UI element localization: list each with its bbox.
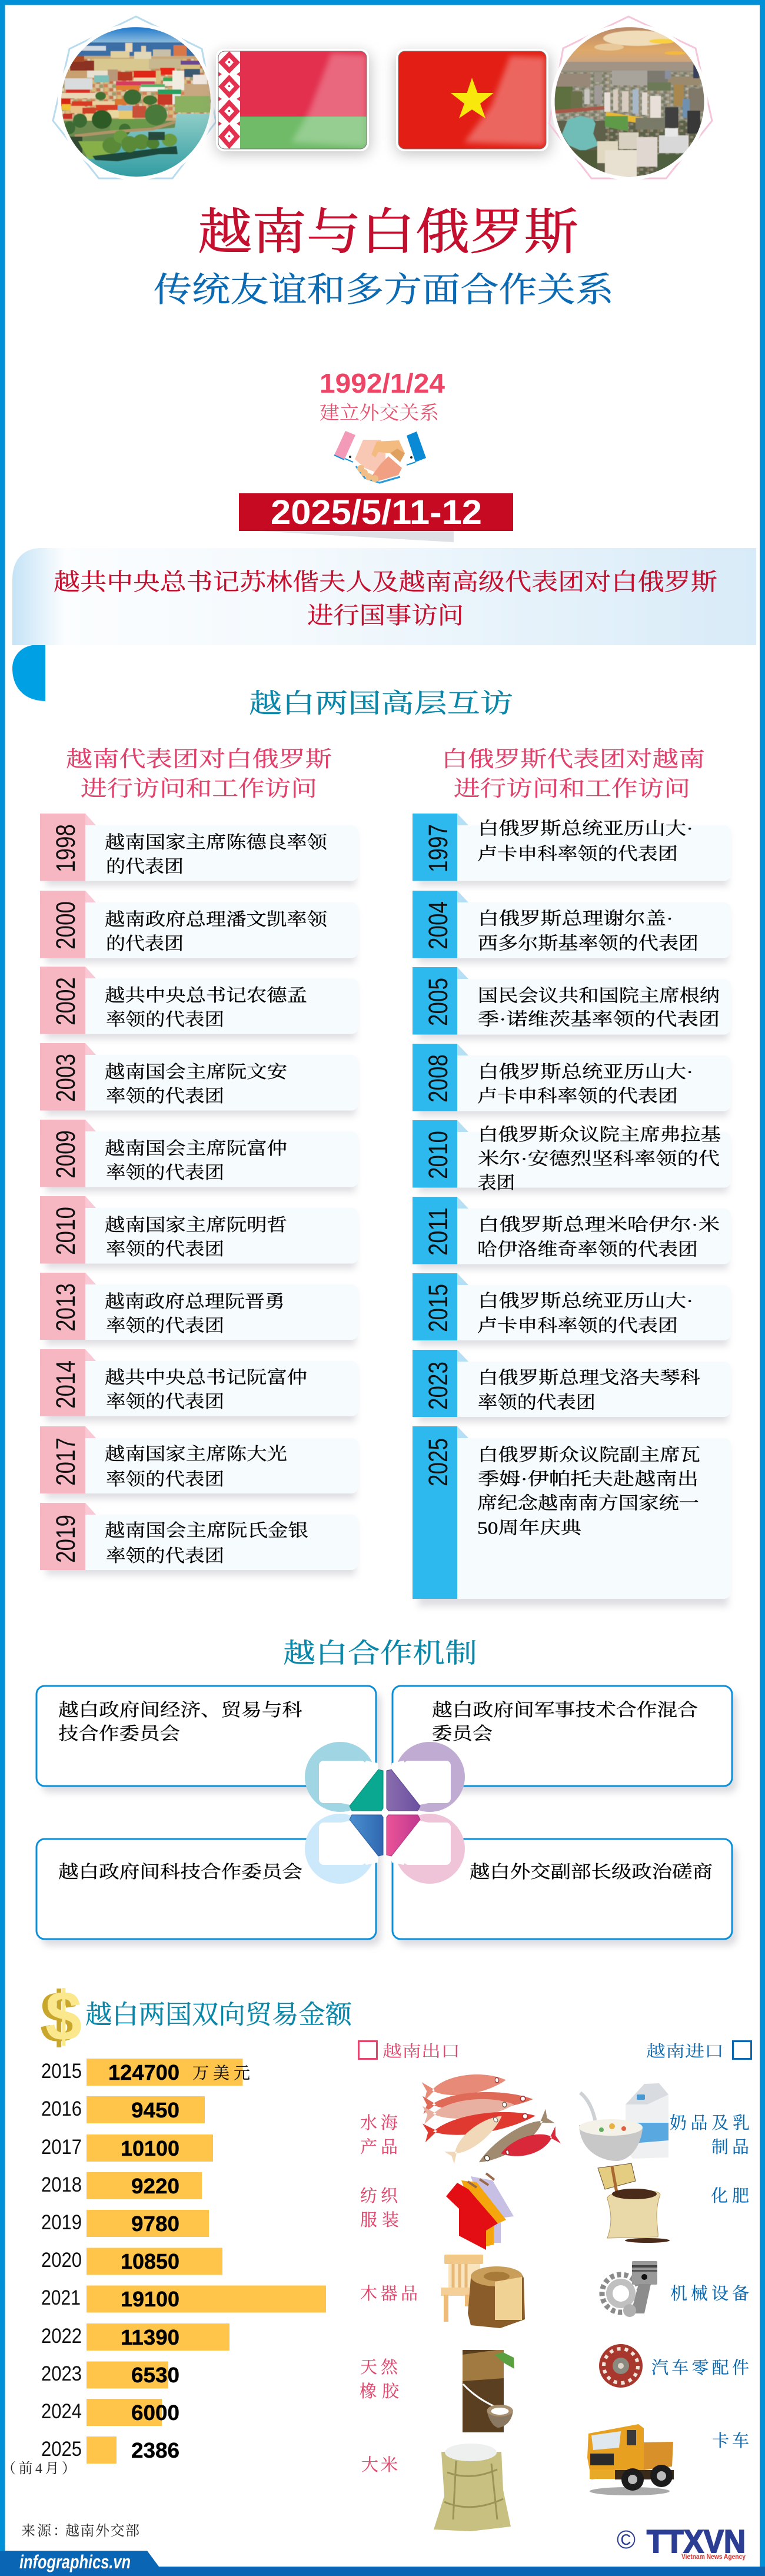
- card: Vietnam 2000: [40, 891, 358, 963]
- card: Vietnam 2013: [40, 1273, 358, 1345]
- import label: auto parts: 汽车零配件: [651, 2358, 749, 2378]
- icon: rice sack: [434, 2444, 511, 2531]
- card: Belarus 2015: 卢卡申科率领的代表团: [477, 1316, 678, 1336]
- bar chart: bilateral trade: 2017: [41, 2136, 82, 2159]
- card: Belarus 1997: 白俄罗斯总统亚历山大·: [478, 819, 693, 838]
- card: Vietnam 2009: 越南国会主席阮富仲: [105, 1139, 287, 1158]
- bar chart: bilateral trade: 9780: [131, 2212, 179, 2236]
- card: Belarus 2011: 白俄罗斯总理米哈伊尔·米: [478, 1215, 720, 1235]
- card: Vietnam 2013: 越南政府总理阮晋勇: [105, 1292, 285, 1312]
- legend: Vietnam imports: 越南进口: [646, 2043, 724, 2060]
- card: Belarus 2010: [413, 1120, 731, 1193]
- legend: Vietnam exports: 越南出口: [382, 2043, 460, 2060]
- source: 越南外交部: [65, 2523, 139, 2539]
- export label: textiles: [360, 2186, 399, 2230]
- icon: fish: [421, 2070, 561, 2170]
- import label: machinery: 机械设备: [670, 2284, 749, 2303]
- photo: Minsk city in octagon frame: [53, 16, 216, 180]
- bar chart: bilateral trade: 11390: [121, 2325, 179, 2349]
- legend: Vietnam imports: [646, 2041, 751, 2060]
- note: first four months: （前4月）: [2, 2461, 76, 2477]
- logo: TTXVN: Vietnam News Agency: [681, 2554, 746, 2561]
- bar chart: bilateral trade: 2018: [41, 2173, 82, 2196]
- card: Belarus 1997: 1997: [423, 824, 453, 872]
- banner: state visit: 进行国事访问: [307, 602, 464, 629]
- card: Vietnam 2019: 率领的代表团: [106, 1546, 224, 1566]
- card: Belarus 2023: 白俄罗斯总理戈洛夫琴科: [478, 1368, 700, 1388]
- bar chart: bilateral trade: 124700: [108, 2060, 179, 2084]
- card: Belarus 2005: [413, 967, 731, 1040]
- icon: dollar sign: $: [41, 1978, 77, 2057]
- title: 越南与白俄罗斯: [198, 205, 578, 260]
- export label: natural rubber: 天然: [360, 2358, 398, 2377]
- mechanism box: science commission: [36, 1839, 381, 1946]
- card: Vietnam 2013: 2013: [51, 1283, 81, 1332]
- card: Vietnam 2000: 2000: [51, 901, 81, 950]
- card: Vietnam 2003: 越南国会主席阮文安: [105, 1063, 287, 1082]
- card: Belarus 2010: 表团: [478, 1174, 515, 1193]
- card: Vietnam 2000: 越南政府总理潘文凯率领: [105, 910, 328, 930]
- subtitle: 传统友谊和多方面合作关系: [154, 271, 614, 309]
- card: Vietnam 1998: 1998: [51, 824, 81, 872]
- column heading: Vietnam delegations: 越南代表团对白俄罗斯: [66, 747, 332, 772]
- bar chart: bilateral trade: 2021: [41, 2286, 81, 2309]
- bar chart: bilateral trade: 9220: [131, 2174, 179, 2198]
- date ribbon: 2025/5/11-12: 2025/5/11-12: [271, 493, 482, 532]
- photo: Hanoi city in octagon frame: [549, 16, 712, 180]
- card: Vietnam 2010: 越南国家主席阮明哲: [105, 1216, 287, 1235]
- bar chart: bilateral trade: 万美元: [192, 2064, 250, 2083]
- card: Vietnam 2014: 率领的代表团: [106, 1392, 224, 1412]
- heading: cooperation mechanisms: 越白合作机制: [283, 1638, 477, 1668]
- export label: seafood: [360, 2113, 398, 2157]
- bar chart: bilateral trade: 10100: [121, 2136, 179, 2160]
- card: Vietnam 2003: [40, 1043, 358, 1116]
- bar chart: bilateral trade: 2023: [41, 2362, 82, 2385]
- card: Belarus 2011: 哈伊洛维奇率领的代表团: [477, 1240, 698, 1260]
- card: Vietnam 2017: 2017: [51, 1438, 81, 1486]
- export label: textiles: 服装: [360, 2210, 399, 2230]
- icon: t-shirts: [446, 2173, 514, 2250]
- card: Vietnam 1998: 越南国家主席陈德良率领: [105, 833, 328, 852]
- icon: clutch disc: [599, 2344, 643, 2388]
- banner fold: [12, 645, 45, 701]
- import label: dairy: 制品: [711, 2137, 749, 2157]
- column heading: Vietnam delegations: 进行访问和工作访问: [81, 776, 317, 801]
- card: Vietnam 2009: 率领的代表团: [106, 1163, 224, 1183]
- card: Belarus 2005: 2005: [423, 978, 453, 1026]
- date: relations established: 建立外交关系: [320, 402, 439, 423]
- petal: blue: [305, 1814, 384, 1884]
- card: Vietnam 2002: 2002: [51, 977, 81, 1025]
- mechanism box: military commission: 越白政府间军事技术合作混合: [432, 1701, 698, 1720]
- logo: TTXVN: TTXVN: [647, 2523, 746, 2560]
- export label: seafood: 水海: [360, 2113, 398, 2133]
- card: Belarus 2025: 白俄罗斯众议院副主席瓦: [478, 1446, 700, 1465]
- export label: natural rubber: 橡胶: [360, 2382, 400, 2401]
- icon: fertilizer sack: [598, 2163, 670, 2243]
- card: Vietnam 2002: [40, 967, 358, 1039]
- legend: Vietnam exports: [359, 2041, 460, 2060]
- export label: textiles: 纺织: [360, 2186, 398, 2206]
- card: Vietnam 2019: 越南国会主席阮氏金银: [105, 1521, 308, 1541]
- bar chart: bilateral trade: 6530: [131, 2363, 179, 2387]
- card: Vietnam 2014: 2014: [51, 1360, 81, 1409]
- card: Vietnam 1998: [40, 814, 358, 886]
- export label: natural rubber: [360, 2358, 400, 2401]
- card: Vietnam 2017: 率领的代表团: [106, 1470, 224, 1489]
- column heading: Belarus delegations: 进行访问和工作访问: [454, 776, 690, 801]
- bar chart: bilateral trade: 2015: [41, 2060, 82, 2083]
- mechanism text: science commission: 越白政府间科技合作委员会: [58, 1863, 302, 1882]
- petal: pink: [386, 1814, 465, 1884]
- card: Belarus 2004: 2004: [423, 901, 453, 950]
- mechanism box: economic commission: [36, 1686, 381, 1792]
- logo: TTXVN: ©: [617, 2525, 636, 2554]
- card: Vietnam 2009: 2009: [51, 1130, 81, 1179]
- footer band: infographics.vn: [19, 2551, 131, 2572]
- card: Belarus 2008: 卢卡申科率领的代表团: [477, 1087, 678, 1106]
- card: Belarus 2008: 白俄罗斯总统亚历山大·: [478, 1063, 693, 1082]
- bar chart: bilateral trade: 2386: [131, 2438, 179, 2462]
- bar chart: bilateral trade: 2020: [41, 2249, 82, 2272]
- mechanism box: economic commission: 技合作委员会: [58, 1724, 180, 1744]
- mechanism text: political consultation: 越白外交副部长级政治磋商: [470, 1863, 713, 1882]
- card: Belarus 2008: [413, 1044, 731, 1116]
- card: Belarus 2023: [413, 1350, 731, 1422]
- bar chart: bilateral trade: 2024: [41, 2400, 82, 2423]
- card: Belarus 2023: 率领的代表团: [478, 1393, 596, 1413]
- card: Belarus 2010: 米尔·安德烈坚科率领的代: [478, 1149, 720, 1169]
- card: Vietnam 1998: 的代表团: [106, 857, 184, 877]
- bar chart: bilateral trade: [41, 2059, 326, 2464]
- card: Vietnam 2019: 2019: [51, 1515, 81, 1563]
- card: Belarus 2010: 白俄罗斯众议院主席弗拉基: [478, 1126, 721, 1144]
- source: 来源：: [21, 2523, 67, 2539]
- card: Belarus 2005: 国民会议共和国院主席根纳: [478, 987, 720, 1005]
- card: Vietnam 2002: 率领的代表团: [106, 1010, 224, 1030]
- card: Vietnam 2002: 越共中央总书记农德孟: [105, 986, 307, 1005]
- card: Belarus 2015: [413, 1273, 731, 1346]
- card: Vietnam 2014: 越共中央总书记阮富仲: [105, 1368, 307, 1387]
- banner: state visit: [12, 548, 756, 645]
- icon: rubber tree: [463, 2350, 514, 2432]
- card: Vietnam 2013: 率领的代表团: [106, 1316, 224, 1336]
- date: relations established: [320, 368, 445, 423]
- card: Belarus 2025: 50周年庆典: [477, 1519, 583, 1538]
- card: Vietnam 2009: [40, 1120, 358, 1192]
- card: Belarus 2004: [413, 891, 731, 963]
- card: Belarus 2005: 季·诺维茨基率领的代表团: [478, 1010, 720, 1029]
- import label: dairy: 奶品及乳: [670, 2113, 750, 2133]
- import label: dairy: [670, 2113, 750, 2157]
- mechanism box: political consultation: [393, 1839, 737, 1946]
- card: Belarus 2010: 2010: [423, 1131, 453, 1179]
- heading: trade value: 越白两国双向贸易金额: [85, 2000, 352, 2029]
- card: Vietnam 2019: [40, 1503, 358, 1575]
- card: Vietnam 2017: [40, 1426, 358, 1499]
- card: Vietnam 2010: 2010: [51, 1207, 81, 1255]
- card: Belarus 2025: 季姆·伊帕托夫赴越南出: [478, 1469, 699, 1489]
- card: Belarus 2025: [413, 1426, 731, 1606]
- card: Vietnam 2010: 率领的代表团: [106, 1240, 224, 1259]
- card: Vietnam 2017: 越南国家主席陈大光: [105, 1445, 287, 1464]
- icon: dump truck: [587, 2424, 674, 2495]
- heading: high-level visits: 越白两国高层互访: [249, 689, 513, 718]
- import label: fertilizer: 化肥: [711, 2186, 749, 2206]
- source: [21, 2523, 139, 2539]
- icon: gear and piston: [602, 2261, 657, 2317]
- petal: purple: [386, 1742, 465, 1812]
- bar chart: bilateral trade: 6000: [131, 2401, 179, 2425]
- column heading: Belarus delegations: 白俄罗斯代表团对越南: [441, 747, 705, 772]
- bar chart: bilateral trade: 2025: [41, 2438, 82, 2461]
- column heading: Belarus delegations: [441, 747, 705, 801]
- card: Belarus 1997: 卢卡申科率领的代表团: [477, 844, 678, 864]
- mechanism box: economic commission: 越白政府间经济、贸易与科: [58, 1701, 302, 1720]
- bar chart: bilateral trade: 2022: [41, 2325, 82, 2348]
- footer band: [0, 2551, 765, 2576]
- card: Belarus 1997: [413, 814, 731, 886]
- icon: milk and cereal bowl: [579, 2083, 668, 2161]
- mechanism box: military commission: 委员会: [432, 1724, 493, 1744]
- card: Vietnam 2014: [40, 1349, 358, 1422]
- banner: state visit: 越共中央总书记苏林偕夫人及越南高级代表团对白俄罗斯: [54, 569, 717, 595]
- import label: trucks: 卡车: [712, 2431, 749, 2451]
- card: Vietnam 2000: 的代表团: [106, 934, 184, 954]
- icon: wooden chair and stump: [441, 2255, 525, 2328]
- column heading: Vietnam delegations: [66, 747, 332, 801]
- card: Belarus 2011: 2011: [423, 1207, 453, 1256]
- flag: Belarus: [216, 49, 370, 154]
- card: Vietnam 2010: [40, 1196, 358, 1269]
- bar chart: bilateral trade: 19100: [121, 2287, 179, 2311]
- card: Belarus 2023: 2023: [423, 1362, 453, 1410]
- icon: handshake: [334, 431, 426, 483]
- bar chart: bilateral trade: 2019: [41, 2211, 82, 2234]
- bar chart: bilateral trade: 10850: [121, 2249, 179, 2273]
- card: Belarus 2004: 西多尔斯基率领的代表团: [478, 934, 699, 954]
- card: Vietnam 2003: 率领的代表团: [106, 1087, 224, 1106]
- card: Belarus 2008: 2008: [423, 1054, 453, 1103]
- card: Belarus 2015: 白俄罗斯总统亚历山大·: [478, 1292, 693, 1311]
- card: Vietnam 2003: 2003: [51, 1054, 81, 1102]
- bar chart: bilateral trade: 2016: [41, 2097, 82, 2120]
- mechanism box: military commission: [393, 1686, 737, 1792]
- export label: wood products: 木器品: [360, 2284, 418, 2303]
- export label: rice: 大米: [361, 2455, 398, 2475]
- card: Belarus 2015: 2015: [423, 1284, 453, 1332]
- petal: teal: [305, 1742, 384, 1812]
- bar chart: bilateral trade: 9450: [131, 2098, 179, 2122]
- date: relations established: 1992/1/24: [320, 368, 445, 399]
- date ribbon: 2025/5/11-12: [239, 493, 513, 542]
- icon: dollar sign: $: [45, 1977, 82, 2056]
- card: Belarus 2004: 白俄罗斯总理谢尔盖·: [478, 909, 673, 929]
- card: Belarus 2025: 席纪念越南南方国家统一: [477, 1494, 699, 1513]
- card: Belarus 2025: 2025: [423, 1438, 453, 1486]
- card: Belarus 2011: [413, 1197, 731, 1269]
- flag: Vietnam: [396, 49, 550, 154]
- export label: seafood: 产品: [360, 2137, 398, 2157]
